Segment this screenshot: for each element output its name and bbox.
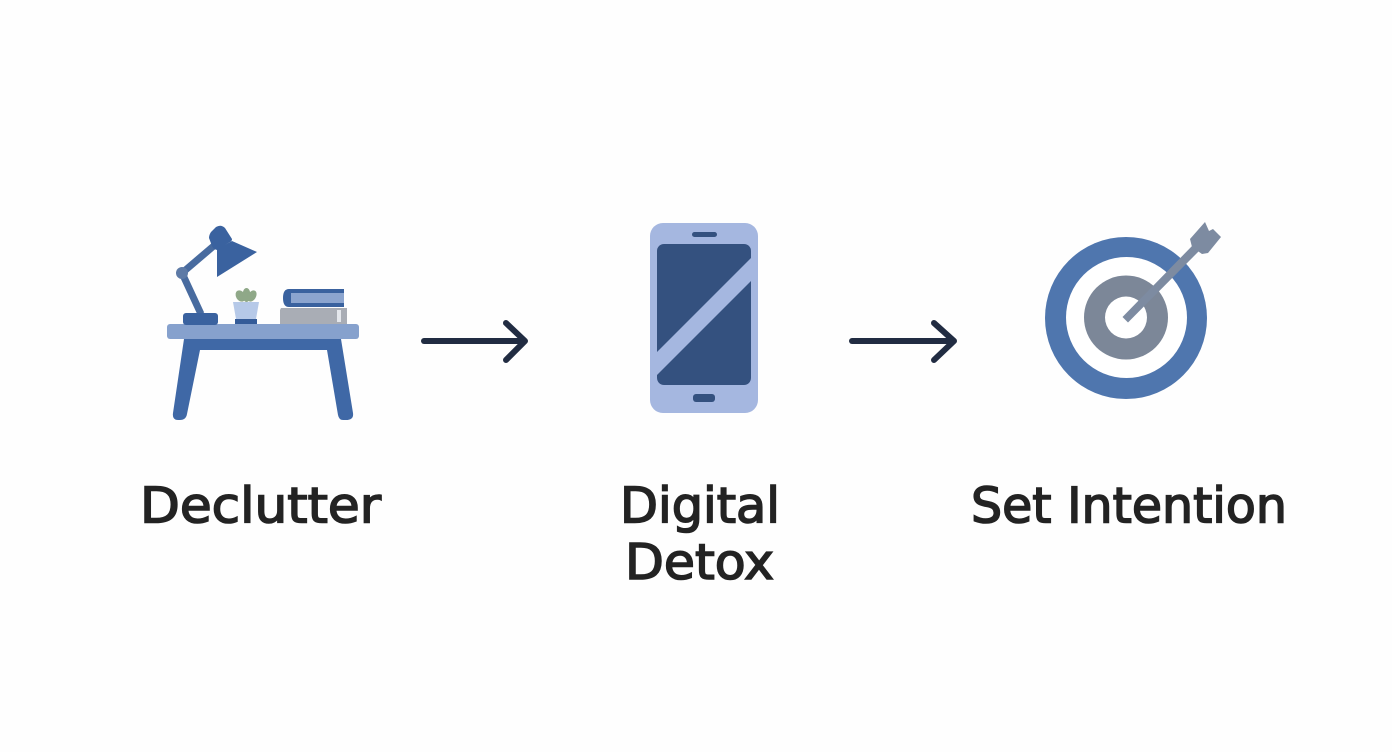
icon: desk with lamp, plant and books: [167, 226, 359, 420]
phone screen: [657, 244, 751, 385]
label: Declutter: Declutter: [140, 478, 382, 534]
slash across the screen: [657, 258, 751, 375]
home button: [693, 394, 715, 402]
icon: target with arrow: [1045, 222, 1221, 399]
outer ring: [1045, 237, 1207, 399]
desk top: [167, 324, 359, 339]
label: Digital Detox: Detox: [625, 534, 774, 591]
speaker: [692, 232, 717, 237]
desk legs and frame: [173, 339, 353, 420]
white ring: [1066, 257, 1187, 378]
icon: phone with slash: [650, 223, 758, 413]
bullseye: [1105, 296, 1147, 338]
dart: [1122, 222, 1221, 322]
label: Set Intention: Set Intention: [971, 478, 1287, 534]
plant: [233, 288, 259, 324]
books: [280, 289, 347, 324]
phone body: [650, 223, 758, 413]
lamp: [176, 226, 257, 325]
label: Digital Detox: [620, 478, 780, 591]
arrow: digital detox to set intention: [852, 323, 954, 360]
label: Digital Detox: Digital: [620, 478, 780, 534]
arrow: declutter to digital detox: [424, 323, 525, 360]
grey ring: [1084, 276, 1168, 360]
